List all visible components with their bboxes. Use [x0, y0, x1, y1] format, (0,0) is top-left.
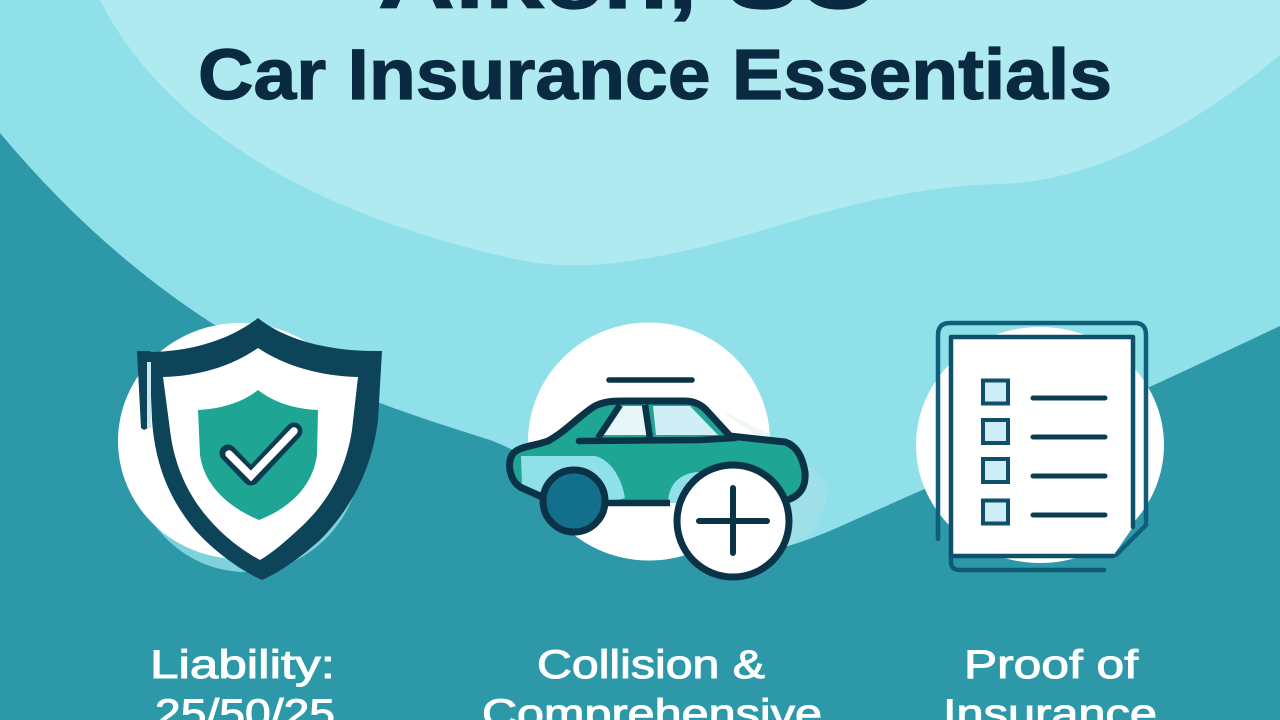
belt line: [579, 438, 735, 441]
front page: [951, 337, 1133, 556]
rear fender highlight: [521, 456, 625, 503]
background: pale header blob: [100, 0, 1280, 265]
checklist row 2: [983, 420, 1105, 443]
label: liability: [150, 643, 335, 720]
shield left highlight: [147, 362, 151, 428]
label: collision and comprehensive: [482, 643, 822, 720]
shield white face: [163, 348, 358, 560]
front window: [653, 406, 718, 435]
document backdrop circle: [916, 327, 1164, 563]
car soft shadow: [720, 410, 830, 545]
shield backdrop shadow: [130, 328, 362, 572]
front wheel arch highlight: [668, 472, 710, 503]
front page outline: [951, 337, 1133, 556]
shield left edge stroke: [137, 351, 150, 430]
roof rack line: [609, 377, 692, 383]
title: [198, 0, 1112, 115]
shield outer frame: [148, 318, 382, 580]
back page outline: [938, 323, 1146, 555]
shield backdrop circle: [118, 323, 362, 559]
checkmark fill: [229, 431, 294, 476]
shield green inner: [198, 390, 318, 520]
icon: proof of insurance document: [916, 323, 1164, 570]
car body: [510, 401, 805, 503]
car outline: [510, 401, 805, 499]
window frame lines: [598, 405, 650, 438]
page bottom edge: [951, 556, 1104, 570]
checklist row 1: [983, 380, 1105, 404]
label: liability: Liability:: [150, 643, 335, 687]
car backdrop circle: [528, 322, 770, 560]
rear window: [602, 406, 648, 435]
plus sign: [699, 488, 767, 553]
label: collision and comprehensive: Collision &: [537, 643, 765, 687]
plus badge: [677, 465, 789, 577]
icon: car with plus: [510, 322, 830, 577]
checklist row 3: [983, 459, 1105, 482]
title line 2: Car Insurance Essentials: [198, 36, 1112, 115]
checkmark outline: [228, 431, 294, 477]
checklist row 4: [983, 500, 1105, 524]
icon: liability shield: [118, 318, 382, 580]
rear wheel: [543, 470, 605, 532]
label: proof of insurance: Proof of: [964, 643, 1139, 687]
label: proof of insurance: [943, 643, 1157, 720]
sill line: [605, 500, 670, 506]
